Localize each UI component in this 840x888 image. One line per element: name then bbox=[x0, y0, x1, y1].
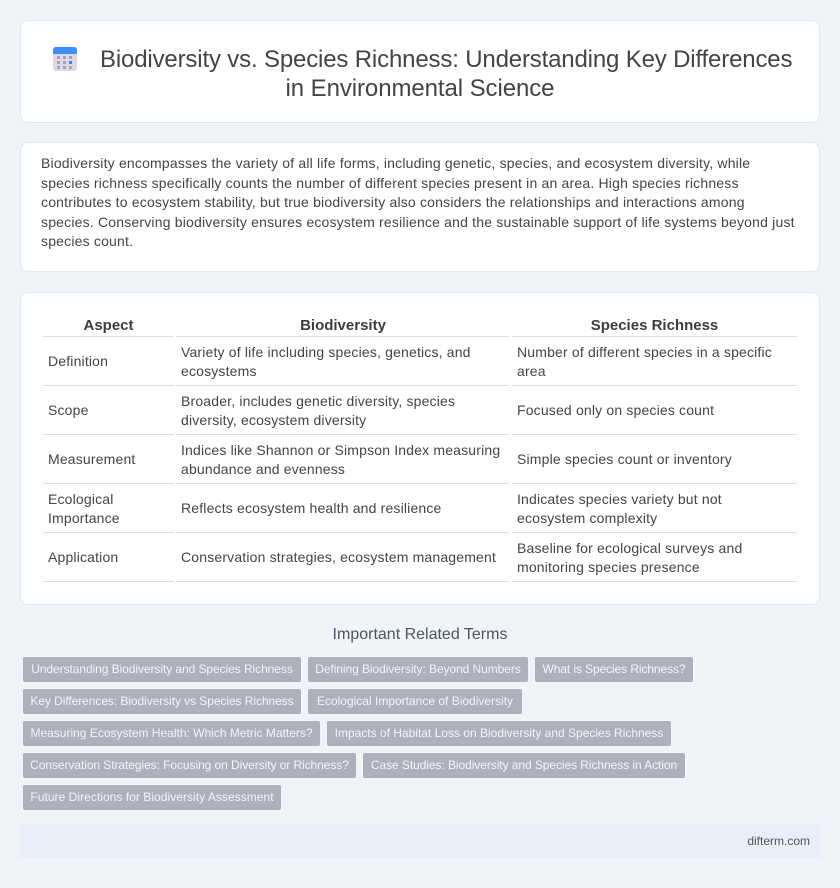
comparison table panel bbox=[20, 292, 820, 605]
table: Focused only on species count bbox=[517, 402, 714, 418]
table: Number of different species in a specific bbox=[517, 344, 772, 360]
table: ecosystems bbox=[181, 363, 257, 379]
header card bbox=[20, 20, 820, 123]
related term tags: Understanding Biodiversity and Species Richness bbox=[31, 662, 293, 676]
table: ecosystem complexity bbox=[517, 510, 657, 526]
icon: calendar grid bbox=[53, 47, 77, 71]
table: Aspect bbox=[83, 317, 134, 334]
title: Biodiversity vs. Species Richness: Understanding Key Differences bbox=[100, 46, 792, 73]
related terms heading: Important Related Terms bbox=[333, 626, 507, 643]
table: monitoring species presence bbox=[517, 559, 700, 575]
intro paragraph: species. Conserving biodiversity ensures ecosystem resilience and the sustainable support of life systems beyond just bbox=[41, 214, 795, 230]
table: Application bbox=[48, 549, 118, 565]
intro paragraph bbox=[41, 155, 795, 249]
intro paragraph: species richness specifically counts the number of different species present in an area. High species richness bbox=[41, 175, 739, 191]
table bbox=[43, 317, 797, 582]
intro paragraph: Biodiversity encompasses the variety of all life forms, including genetic, species, and ecosystem diversity, while bbox=[41, 155, 750, 171]
related term tags bbox=[23, 657, 693, 810]
table: Ecological bbox=[48, 491, 114, 507]
table: Definition bbox=[48, 353, 108, 369]
table: Reflects ecosystem health and resilience bbox=[181, 500, 441, 516]
intro paragraph: contributes to ecosystem stability, but true biodiversity also considers the relationships and interactions among bbox=[41, 194, 745, 210]
related term tags: Defining Biodiversity: Beyond Numbers bbox=[315, 662, 521, 676]
related term tags: Future Directions for Biodiversity Assessment bbox=[30, 790, 274, 804]
table: Measurement bbox=[48, 451, 135, 467]
related term tags: What is Species Richness? bbox=[543, 662, 685, 676]
related term tags: Conservation Strategies: Focusing on Diversity or Richness? bbox=[30, 758, 349, 772]
related term tags: Ecological Importance of Biodiversity bbox=[317, 694, 513, 708]
footer site name: difterm.com bbox=[747, 834, 810, 848]
table: Indices like Shannon or Simpson Index measuring bbox=[181, 442, 500, 458]
table: diversity, ecosystem diversity bbox=[181, 412, 366, 428]
table: Biodiversity bbox=[300, 317, 386, 334]
table: Baseline for ecological surveys and bbox=[517, 540, 742, 556]
table: abundance and evenness bbox=[181, 461, 345, 477]
related term tags: Case Studies: Biodiversity and Species Richness in Action bbox=[371, 758, 677, 772]
table: Importance bbox=[48, 510, 120, 526]
title bbox=[100, 46, 792, 102]
table: Indicates species variety but not bbox=[517, 491, 722, 507]
table: Scope bbox=[48, 402, 89, 418]
intro text panel bbox=[20, 142, 820, 272]
table: area bbox=[517, 363, 546, 379]
related term tags: Key Differences: Biodiversity vs Species Richness bbox=[30, 694, 294, 708]
title: in Environmental Science bbox=[286, 75, 554, 102]
table: Species Richness bbox=[591, 317, 718, 334]
table: Conservation strategies, ecosystem management bbox=[181, 549, 496, 565]
table: Simple species count or inventory bbox=[517, 451, 732, 467]
intro paragraph: species count. bbox=[41, 233, 133, 249]
related term tags: Impacts of Habitat Loss on Biodiversity and Species Richness bbox=[335, 726, 663, 740]
footer bar bbox=[20, 824, 820, 858]
table: Variety of life including species, genetics, and bbox=[181, 344, 471, 360]
related term tags: Measuring Ecosystem Health: Which Metric Matters? bbox=[30, 726, 313, 740]
table: Broader, includes genetic diversity, species bbox=[181, 393, 455, 409]
